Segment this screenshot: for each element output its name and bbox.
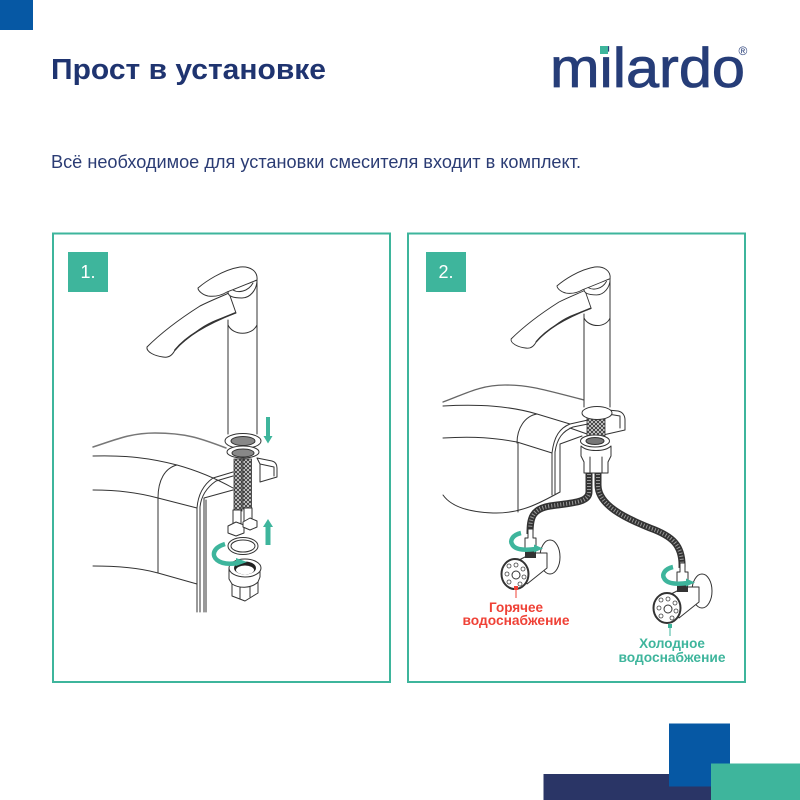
corner blocks — [544, 724, 800, 800]
valve hot — [502, 529, 560, 589]
label: cold water: Холодное — [639, 636, 705, 651]
logo: milardo: ® — [738, 44, 748, 58]
title: Прост в установке — [51, 54, 326, 86]
arrow: rotation cold — [663, 567, 695, 586]
hose right — [598, 462, 682, 568]
panel: step 2 — [408, 234, 745, 682]
step 1 badge: 1. — [80, 262, 96, 282]
faucet 1 — [147, 267, 257, 438]
arrow: up — [263, 519, 273, 545]
arrow: rotation hot — [511, 533, 543, 552]
label: hot water: Горячее — [489, 600, 544, 615]
corner square — [0, 0, 33, 30]
mounting assembly 2 — [580, 406, 612, 473]
subtitle: Всё необходимое для установки смесителя входит в комплект. — [51, 151, 581, 172]
gasket ring — [228, 538, 258, 554]
sink 1 — [93, 433, 277, 612]
sink 2 — [443, 385, 625, 513]
hose left — [530, 462, 589, 534]
step 1 badge — [68, 252, 108, 292]
arrow: down — [264, 417, 272, 444]
label: hot water — [462, 586, 570, 628]
label: cold water — [618, 624, 726, 665]
panel: step 1 — [53, 234, 390, 682]
nut — [229, 559, 261, 601]
flanges and hoses 1 — [225, 434, 261, 536]
faucet 2 — [511, 267, 610, 411]
logo: milardo: milardo — [550, 36, 745, 99]
label: hot water: водоснабжение — [462, 613, 570, 628]
arrow: rotation 1 — [214, 544, 247, 566]
step 2 badge: 2. — [438, 262, 454, 282]
valve cold — [654, 563, 712, 623]
label: cold water: водоснабжение — [618, 650, 726, 665]
step 2 badge — [426, 252, 466, 292]
